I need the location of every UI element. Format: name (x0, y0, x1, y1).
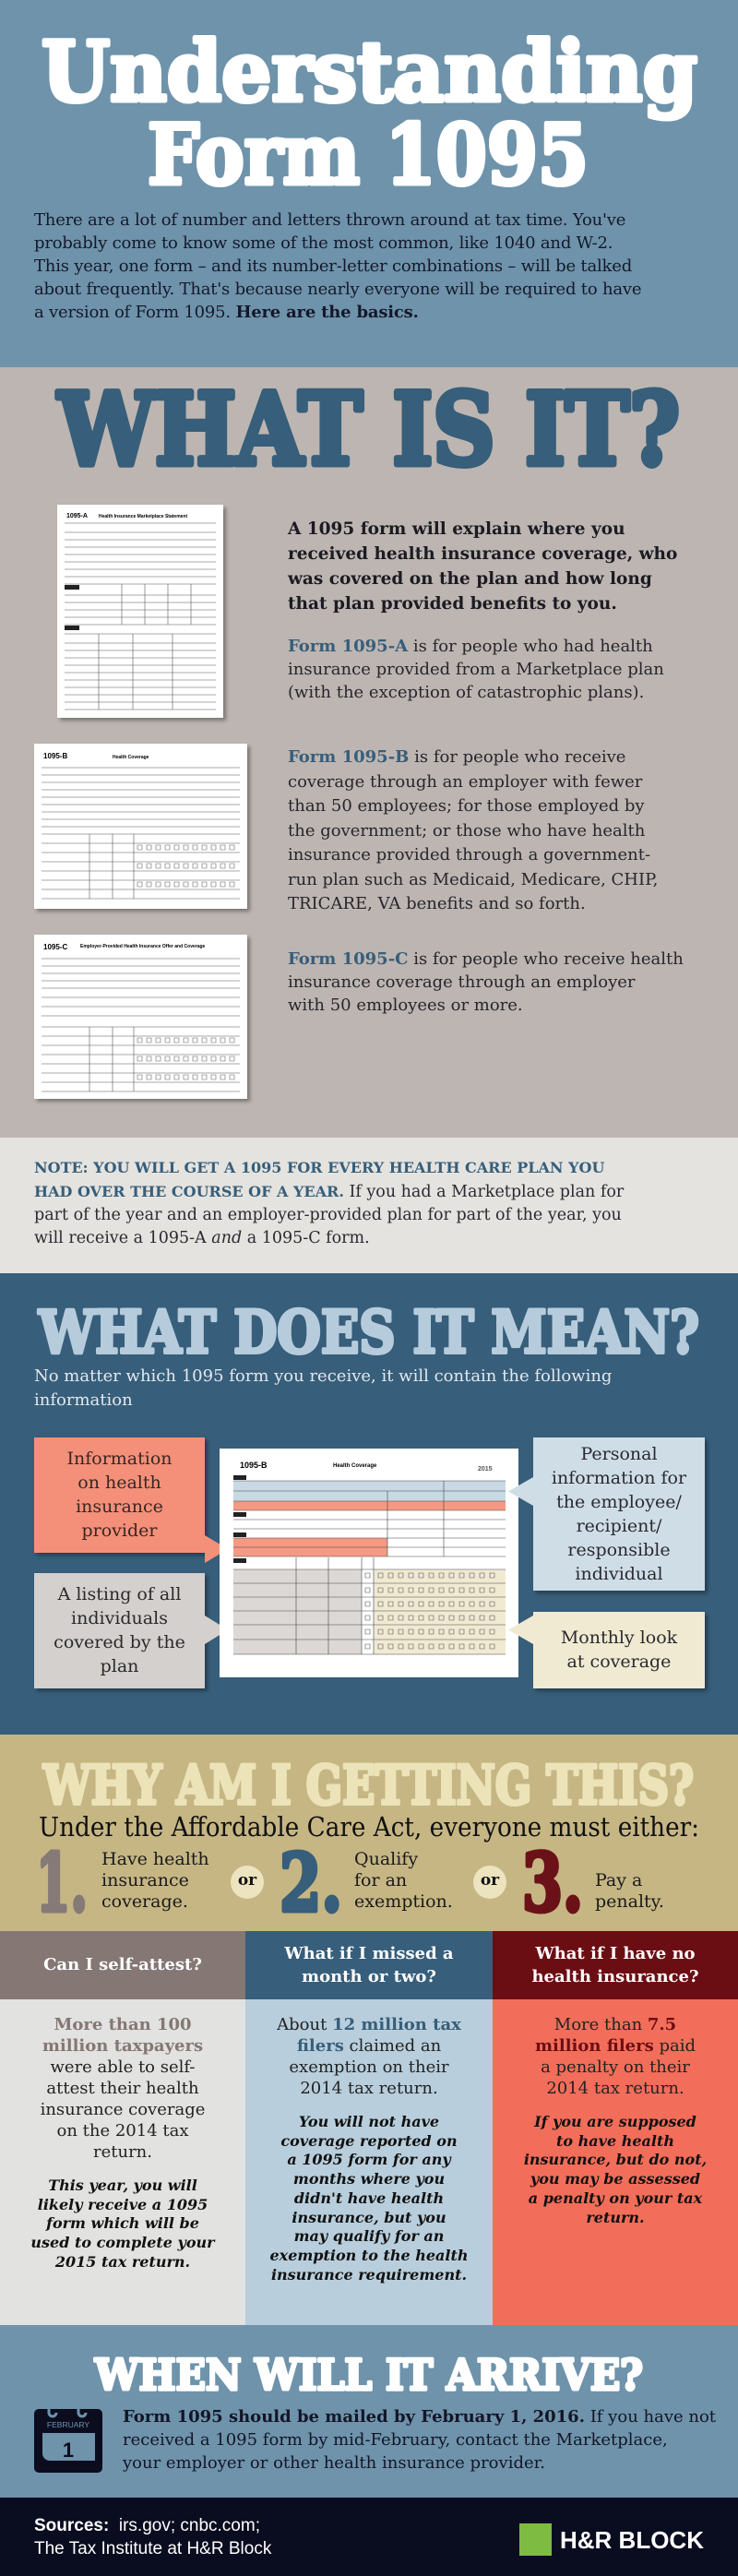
callout: personal information (533, 1437, 705, 1591)
column body: were able to self- (51, 2057, 195, 2077)
arrow: monthly (508, 1616, 533, 1644)
intro text: This year, one form – and its number-letter combinations – will be talked (34, 256, 632, 276)
callout: personal information: information for (552, 1468, 686, 1488)
option 2: Qualify (354, 1849, 418, 1869)
column header: What if I have no (535, 1944, 696, 1963)
callout: listing of individuals: covered by the (54, 1632, 185, 1652)
column body: return. (93, 2142, 152, 2162)
option 1: coverage. (101, 1891, 188, 1912)
logo: H&R Block: H&R BLOCK (560, 2526, 704, 2554)
callout: listing of individuals (34, 1573, 205, 1688)
column note: you may be assessed (530, 2170, 700, 2188)
column note: didn't have health (294, 2189, 444, 2207)
text: what is 1095 (288, 519, 677, 614)
callout: insurance provider: provider (81, 1521, 157, 1541)
note text: HAD OVER THE COURSE OF A YEAR. If you had a Marketplace plan for (34, 1183, 624, 1201)
option 2: exemption. (354, 1891, 453, 1912)
intro text: a version of Form 1095. Here are the basics. (34, 303, 419, 322)
option 1: insurance (101, 1870, 189, 1890)
column body: About 12 million tax (277, 2015, 461, 2034)
column note: a penalty on your tax (529, 2189, 702, 2207)
intro text: probably come to know some of the most common, like 1040 and W-2. (34, 233, 613, 253)
text: form 1095-C: with 50 employees or more. (288, 996, 523, 1015)
column body: More than 7.5 (554, 2015, 676, 2034)
text: what is 1095: was covered on the plan and how long (288, 569, 652, 589)
icon: calendar (34, 2409, 102, 2473)
subtitle: information (34, 1390, 133, 1410)
callout: listing of individuals: plan (101, 1656, 138, 1676)
arrival text: Form 1095 should be mailed by February 1, 2016. If you have not (123, 2407, 716, 2427)
or circle 1: or (238, 1871, 256, 1890)
icon: form 1095-B: 1095-B (43, 752, 67, 760)
column note: form which will be (46, 2214, 199, 2232)
column body: filers claimed an (297, 2036, 441, 2056)
option 1 (36, 1849, 209, 1915)
text: form 1095-A: (with the exception of catastrophic plans). (288, 683, 644, 702)
text: form 1095-B: Form 1095-B is for people who receive (288, 747, 625, 767)
column note: months where you (293, 2170, 445, 2188)
heading: when: WHEN WILL IT ARRIVE? (94, 2350, 643, 2399)
column body: million filers paid (535, 2036, 696, 2056)
column body: exemption on their (289, 2057, 449, 2077)
column body: on the 2014 tax (57, 2121, 188, 2141)
note text: part of the year and an employer-provided plan for part of the year, you (34, 1206, 622, 1224)
callout: insurance provider: insurance (76, 1497, 163, 1517)
callout: personal information: recipient/ (577, 1516, 661, 1536)
column header (245, 1931, 493, 1999)
callout: listing of individuals: individuals (71, 1608, 168, 1628)
option 2: for an (354, 1870, 407, 1890)
icon: calendar: FEBRUARY (47, 2420, 89, 2429)
text: what is 1095: received health insurance coverage, who (288, 544, 677, 564)
column note: return. (586, 2209, 645, 2226)
text: form 1095-C: Form 1095-C is for people who receive health (288, 949, 684, 969)
column body: 2014 tax return. (546, 2079, 684, 2098)
column note: a 1095 form for any (287, 2151, 451, 2168)
or circle 1 (231, 1866, 264, 1899)
intro text (34, 210, 641, 322)
icon: form 1095-C: Employer-Provided Health Insurance Offer and Coverage (80, 944, 206, 949)
column note (269, 2113, 469, 2284)
panel: column missed month (245, 1931, 493, 2325)
column note: exemption to the health (269, 2247, 469, 2264)
callout: personal information: individual (575, 1564, 663, 1584)
panel: header (0, 0, 738, 367)
column header (493, 1931, 738, 1999)
title: Understanding (42, 23, 697, 121)
column note: may qualify for an (294, 2227, 444, 2245)
text: form 1095-B (288, 747, 658, 913)
option 2 (280, 1849, 453, 1915)
column body: 2014 tax return. (300, 2079, 438, 2098)
column note: likely receive a 1095 (38, 2196, 208, 2213)
callout: monthly look (533, 1612, 705, 1688)
column body: attest their health (46, 2079, 199, 2098)
column note: You will not have (299, 2113, 439, 2130)
form image 1095-B: Health Coverage (333, 1463, 377, 1469)
text: what is 1095: that plan provided benefits to you. (288, 594, 617, 614)
column body: More than 100 (54, 2015, 192, 2034)
column note: coverage reported on (280, 2132, 458, 2150)
title (42, 23, 697, 203)
option 3 (522, 1849, 664, 1915)
intro text: There are a lot of number and letters thrown around at tax time. You've (34, 210, 625, 230)
sources (34, 2516, 271, 2558)
subtitle (34, 1366, 612, 1410)
panel: when will it arrive (0, 2325, 738, 2498)
callout: insurance provider: Information (66, 1449, 173, 1469)
icon: form 1095-A: 1095-A (66, 513, 88, 519)
text: form 1095-B: than 50 employees; for those employed by (288, 796, 645, 816)
callout: insurance provider (34, 1437, 205, 1553)
or circle 2: or (481, 1871, 499, 1890)
column header: month or two? (302, 1967, 436, 1986)
option 1: Have health (101, 1849, 209, 1869)
arrow: provider (205, 1535, 220, 1563)
subtitle: No matter which 1095 form you receive, it will contain the following (34, 1366, 612, 1386)
text: form 1095-B: run plan such as Medicaid, Medicare, CHIP, (288, 869, 658, 889)
text: form 1095-C (288, 949, 684, 1015)
column note: 2015 tax return. (55, 2253, 190, 2271)
arrow: listing (205, 1616, 220, 1644)
column note: insurance, but you (292, 2209, 446, 2226)
column body: a penalty on their (541, 2057, 690, 2077)
title: Form 1095 (148, 106, 589, 203)
icon: form 1095-C (34, 935, 247, 1099)
icon: form 1095-C: 1095-C (43, 943, 67, 951)
column note: insurance requirement. (271, 2266, 467, 2284)
option 3: Pay a (595, 1870, 642, 1890)
note text: will receive a 1095-A and a 1095-C form. (34, 1229, 370, 1247)
heading: why am i getting this (39, 1754, 699, 1843)
column note: This year, you will (48, 2176, 197, 2194)
column body: insurance coverage (41, 2100, 205, 2119)
column note (524, 2113, 707, 2226)
text: form 1095-A (288, 637, 664, 702)
note text: NOTE: YOU WILL GET A 1095 FOR EVERY HEALTH CARE PLAN YOU (34, 1159, 604, 1176)
icon: form 1095-A (57, 505, 223, 718)
form image 1095-B: 2015 (478, 1466, 493, 1473)
or circle 2 (473, 1866, 506, 1899)
column note: If you are supposed (534, 2113, 696, 2130)
note text (34, 1159, 624, 1247)
intro text: about frequently. That's because nearly everyone will be required to have (34, 280, 641, 299)
sources: Sources: irs.gov; cnbc.com; (34, 2516, 260, 2535)
arrival text: received a 1095 form by mid-February, contact the Marketplace, (123, 2430, 668, 2450)
column note: used to complete your (30, 2234, 215, 2251)
form image 1095-B (220, 1449, 518, 1677)
text: form 1095-B: insurance provided through a government- (288, 845, 650, 865)
arrow: personal information (508, 1477, 533, 1506)
column header: Can I self-attest? (43, 1955, 202, 1974)
text: form 1095-B: coverage through an employer with fewer (288, 771, 642, 792)
text: form 1095-B: the government; or those who have health (288, 821, 645, 840)
column note (30, 2176, 216, 2271)
column body (41, 2015, 205, 2162)
panel: what does it mean (0, 1273, 738, 1735)
text: form 1095-A: insurance provided from a Marketplace plan (288, 660, 664, 679)
panel: footer (0, 2498, 738, 2576)
arrival text (122, 2407, 716, 2473)
text: what is 1095: A 1095 form will explain where you (288, 519, 625, 539)
callout: personal information: the employee/ (556, 1492, 682, 1512)
callout: personal information: Personal (580, 1444, 658, 1464)
text: form 1095-B: TRICARE, VA benefits and so forth. (288, 894, 586, 913)
icon: calendar: 1 (63, 2439, 74, 2462)
option 3: penalty. (595, 1891, 664, 1912)
sources: The Tax Institute at H&R Block (34, 2539, 271, 2558)
text: form 1095-C: insurance coverage through an employer (288, 972, 636, 992)
icon: form 1095-A: Health Insurance Marketplace Statement (99, 514, 187, 519)
callout: personal information: responsible (567, 1540, 671, 1560)
text: form 1095-A: Form 1095-A is for people who had health (288, 637, 653, 656)
form image 1095-B: 1095-B (240, 1461, 268, 1470)
callout: listing of individuals: A listing of all (58, 1584, 181, 1604)
callout: insurance provider: on health (77, 1473, 161, 1493)
icon: form 1095-B (34, 744, 247, 909)
column header: What if I missed a (284, 1944, 454, 1963)
column body (535, 2015, 696, 2098)
panel: column no insurance (493, 1931, 738, 2325)
logo: H&R Block (519, 2523, 704, 2556)
column header (0, 1931, 245, 1999)
icon: form 1095-B: Health Coverage (113, 755, 149, 760)
column body: million taxpayers (42, 2036, 203, 2056)
callout: monthly look: at coverage (567, 1652, 671, 1672)
panel: why am I getting this (0, 1735, 738, 1931)
column header: health insurance? (531, 1967, 699, 1986)
panel: column self-attest (0, 1931, 245, 2325)
panel: note (0, 1138, 738, 1273)
column note: to have health (556, 2132, 674, 2150)
arrival text: your employer or other health insurance provider. (123, 2453, 545, 2473)
panel: what is it (0, 367, 738, 1138)
column note: insurance, but do not, (524, 2151, 707, 2168)
column body (277, 2015, 461, 2098)
callout: monthly look: Monthly look (561, 1628, 677, 1648)
